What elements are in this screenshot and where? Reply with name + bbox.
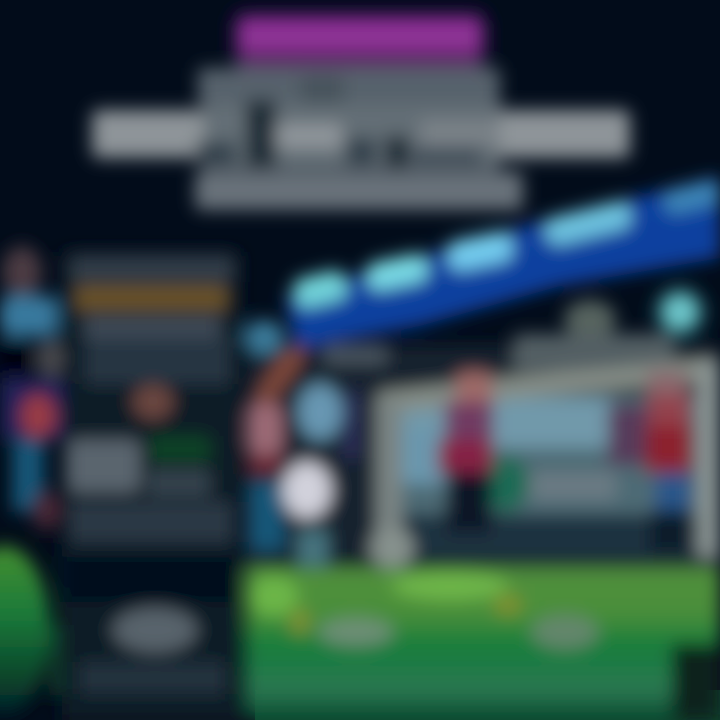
goal label: [530, 472, 616, 500]
lower text: [80, 662, 225, 694]
lower stat: [113, 608, 197, 652]
panel: left information column: [62, 252, 240, 720]
band segments: [291, 179, 720, 310]
goal frame: [370, 358, 720, 568]
right player: [608, 372, 692, 552]
band shape: [285, 176, 720, 348]
dark divider band: [70, 556, 235, 602]
pitch: [245, 568, 720, 720]
left pitch: [0, 546, 100, 714]
pitch label right: [531, 615, 599, 649]
panel body text: [70, 502, 232, 542]
panel background: [62, 252, 240, 720]
subtitle: [195, 172, 523, 210]
centre player: [438, 372, 493, 532]
left player: [0, 246, 64, 530]
badge pill: [232, 10, 488, 68]
dark corner: [672, 644, 720, 720]
panel heading bar: [72, 256, 232, 310]
goal: [370, 358, 720, 568]
football: [283, 462, 331, 518]
left scene player: [244, 320, 360, 566]
icon: round marker: [133, 385, 173, 419]
grass base: [245, 568, 720, 720]
pitch edge base: [255, 690, 720, 720]
pitch label left: [318, 618, 394, 646]
grass highlights: [250, 572, 522, 635]
goal net: [400, 395, 700, 558]
callout: upper right label: [514, 300, 674, 372]
icon: glowing circle: [654, 286, 706, 338]
scene backdrop: [245, 345, 720, 570]
small text near left player: [325, 344, 387, 364]
scoreboard band: [285, 176, 720, 348]
stat block: [68, 436, 210, 496]
title block: [92, 68, 630, 170]
panel intro text: [85, 316, 230, 384]
